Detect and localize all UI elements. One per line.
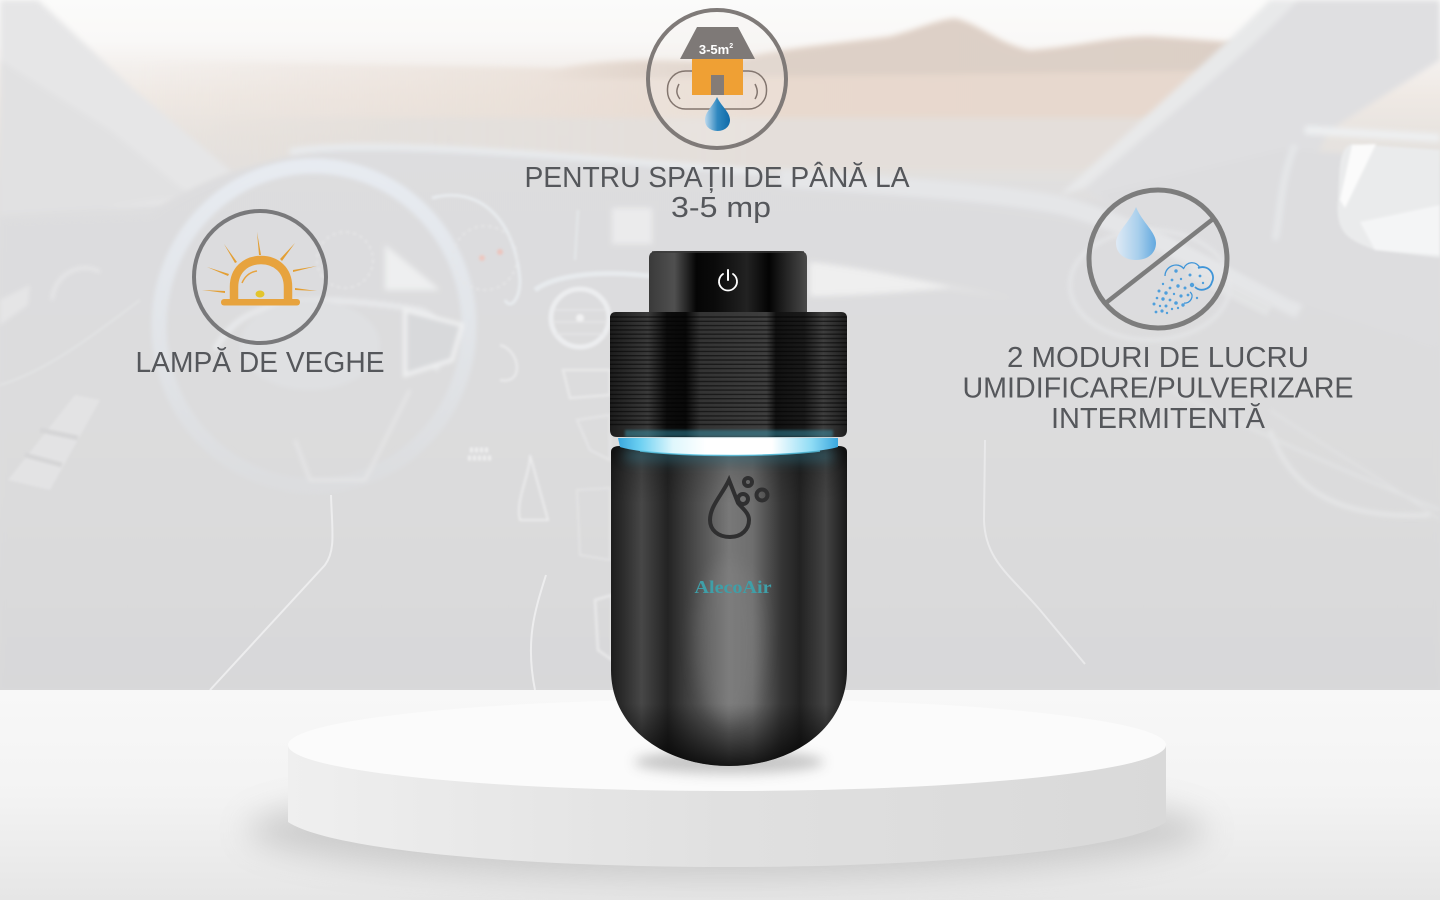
- icon: mist and spray crossed: [1089, 190, 1227, 328]
- floor lines and left door controls: [0, 300, 1085, 690]
- product: AlecoAir diffuser: [605, 251, 855, 768]
- background: car interior photo: [0, 0, 1440, 690]
- steering wheel: [3, 158, 476, 388]
- caption: LAMPĂ DE VEGHE: [136, 346, 384, 379]
- product contact shadow: [634, 750, 824, 774]
- ribbed collar: [610, 312, 847, 437]
- platform shadow: [247, 782, 1207, 878]
- platform top: [288, 699, 1166, 791]
- instrument gauges: [432, 194, 522, 381]
- dashboard: [291, 144, 1298, 313]
- icon: house with drop: 3-5m: [699, 42, 729, 57]
- icon: house with drop: [648, 10, 786, 148]
- right pillar: [1072, 0, 1440, 236]
- body capsule: [605, 446, 855, 768]
- side mirror: [1338, 144, 1440, 258]
- platform: [247, 699, 1207, 878]
- icon: lamp: [194, 211, 326, 343]
- icon: AlecoAir logo: [710, 478, 768, 537]
- centre console: [468, 271, 649, 660]
- caption: 3-5 mp: [671, 192, 771, 224]
- floor: [0, 690, 1440, 900]
- platform side: [288, 745, 1166, 867]
- feature: night lamp: [136, 211, 384, 379]
- caption: INTERMITENTĂ: [1051, 402, 1266, 435]
- caption: PENTRU SPAȚII DE PÂNĂ LA: [524, 161, 910, 194]
- glow ring: [618, 438, 838, 456]
- landscape hills: [348, 16, 1228, 122]
- icon: power button: [719, 270, 737, 290]
- door details: [1227, 292, 1422, 516]
- icon: house with drop: 2: [729, 43, 733, 50]
- brand name: AlecoAir: [694, 577, 772, 597]
- feature: room size: [524, 10, 910, 224]
- left pillar: [0, 0, 224, 180]
- caption: UMIDIFICARE/PULVERIZARE: [962, 372, 1354, 404]
- feature: working modes: [962, 190, 1354, 435]
- caption: 2 MODURI DE LUCRU: [1007, 342, 1309, 374]
- power cap: [649, 251, 807, 312]
